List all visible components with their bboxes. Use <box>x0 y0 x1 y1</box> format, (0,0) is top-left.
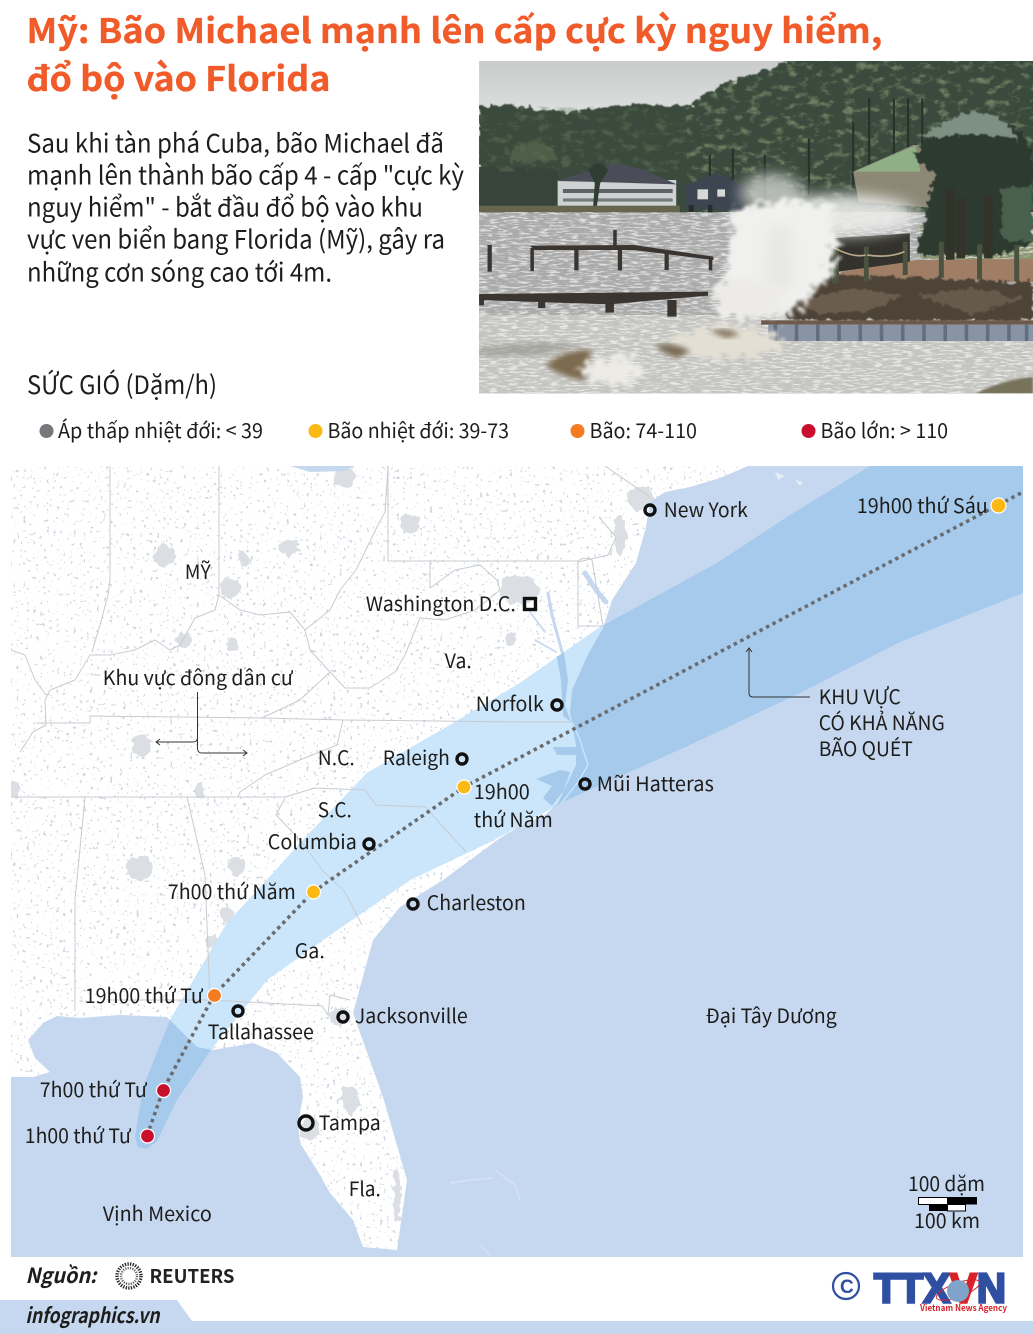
footer band with website: infographics.vn <box>26 1300 161 1330</box>
scale bar: 100 km <box>914 1205 980 1234</box>
logo: TTXVN Vietnam News Agency: TTXVN <box>874 1265 1006 1312</box>
intro text block: Sau khi tàn phá Cuba, bão Michael đã <box>27 124 444 160</box>
outer banks <box>560 722 588 805</box>
map labels: Mũi Hatteras <box>597 768 714 797</box>
map labels: Raleigh <box>383 742 450 771</box>
map labels: S.C. <box>318 794 352 823</box>
scale bar: 100 dặm <box>908 1168 985 1197</box>
offshore islands <box>775 472 803 486</box>
map labels: BÃO QUÉT <box>819 733 913 762</box>
map labels: Ga. <box>295 935 325 964</box>
land: eastern United States <box>11 466 748 1250</box>
source line: Nguồn: <box>26 1260 99 1290</box>
map labels: 7h00 thứ Năm <box>168 876 296 905</box>
title <box>26 4 882 101</box>
title: Mỹ: Bão Michael mạnh lên cấp cực kỳ nguy hiểm, <box>26 4 882 53</box>
Delmarva peninsula in swath <box>588 629 602 654</box>
map labels: N.C. <box>318 742 355 771</box>
map labels: Columbia <box>268 826 357 855</box>
sea background <box>11 466 1023 1257</box>
Chesapeake Bay in swath <box>557 652 571 722</box>
wind swath over sea <box>135 466 1023 1149</box>
map labels: MỸ <box>185 556 211 585</box>
map labels: Jacksonville <box>355 1000 468 1029</box>
map labels: Norfolk <box>476 688 544 717</box>
photo: storm waves on the Florida coast <box>479 61 1033 394</box>
arrow: populated areas callout <box>156 692 247 756</box>
intro text block <box>27 124 464 290</box>
arrow: swath area callout <box>746 648 810 697</box>
legend: wind speed categories: Áp thấp nhiệt đới: < 39 <box>58 414 263 444</box>
source line <box>26 1260 235 1290</box>
map labels: Tallahassee <box>208 1016 314 1045</box>
source line: REUTERS <box>150 1262 235 1289</box>
intro text block: mạnh lên thành bão cấp 4 - cấp "cực kỳ <box>27 156 464 192</box>
map labels: thứ Năm <box>474 804 553 833</box>
map labels: Fla. <box>349 1173 381 1202</box>
intro text block: nguy hiểm" - bắt đầu đổ bộ vào khu <box>27 188 423 224</box>
logo: TTXVN Vietnam News Agency: Vietnam News Agency <box>919 1301 1008 1314</box>
map labels: Vịnh Mexico <box>103 1198 212 1227</box>
coastal waters: bays <box>530 573 606 655</box>
map labels: New York <box>664 494 748 523</box>
legend: wind speed categories: Bão nhiệt đới: 39-73 <box>328 414 509 444</box>
lake Erie <box>290 466 355 472</box>
wind swath over land <box>170 625 604 1050</box>
map labels: Đại Tây Dương <box>706 1000 837 1029</box>
intro text block: vực ven biển bang Florida (Mỹ), gây ra <box>27 220 445 256</box>
decorative islands <box>450 1170 520 1255</box>
storm track: dotted line <box>147 492 1023 1136</box>
map labels: 7h00 thứ Tư <box>40 1074 148 1103</box>
map labels: Charleston <box>427 887 526 916</box>
legend heading: SỨC GIÓ (Dặm/h) <box>27 365 217 402</box>
map labels: Washington D.C. <box>366 588 516 617</box>
map labels: CÓ KHẢ NĂNG <box>819 707 945 736</box>
map labels: 19h00 thứ Tư <box>85 980 204 1009</box>
legend: wind speed categories: Bão: 74-110 <box>590 414 697 444</box>
map labels: 19h00 thứ Sáu <box>857 490 988 519</box>
map labels: 19h00 <box>474 776 530 805</box>
map labels: Va. <box>445 645 472 674</box>
state borders <box>11 466 650 1015</box>
title: đổ bộ vào Florida <box>26 52 330 101</box>
map labels <box>25 490 988 1227</box>
legend: wind speed categories: Bão lớn: > 110 <box>820 414 948 444</box>
map: hurricane track <box>11 466 1023 1257</box>
map labels: KHU VỰC <box>819 681 901 710</box>
footer band with website <box>0 1300 1033 1334</box>
legend: wind speed categories <box>40 414 948 444</box>
logo: TTXVN Vietnam News Agency: C <box>840 1277 854 1298</box>
sounds of North Carolina <box>536 747 576 806</box>
track points <box>140 498 1006 1143</box>
map labels: 1h00 thứ Tư <box>25 1120 132 1149</box>
map labels: Khu vực đông dân cư <box>103 662 294 691</box>
map labels: Tampa <box>319 1107 381 1136</box>
city markers <box>233 505 655 1130</box>
scale bar <box>908 1168 985 1234</box>
intro text block: những cơn sóng cao tới 4m. <box>27 252 332 290</box>
